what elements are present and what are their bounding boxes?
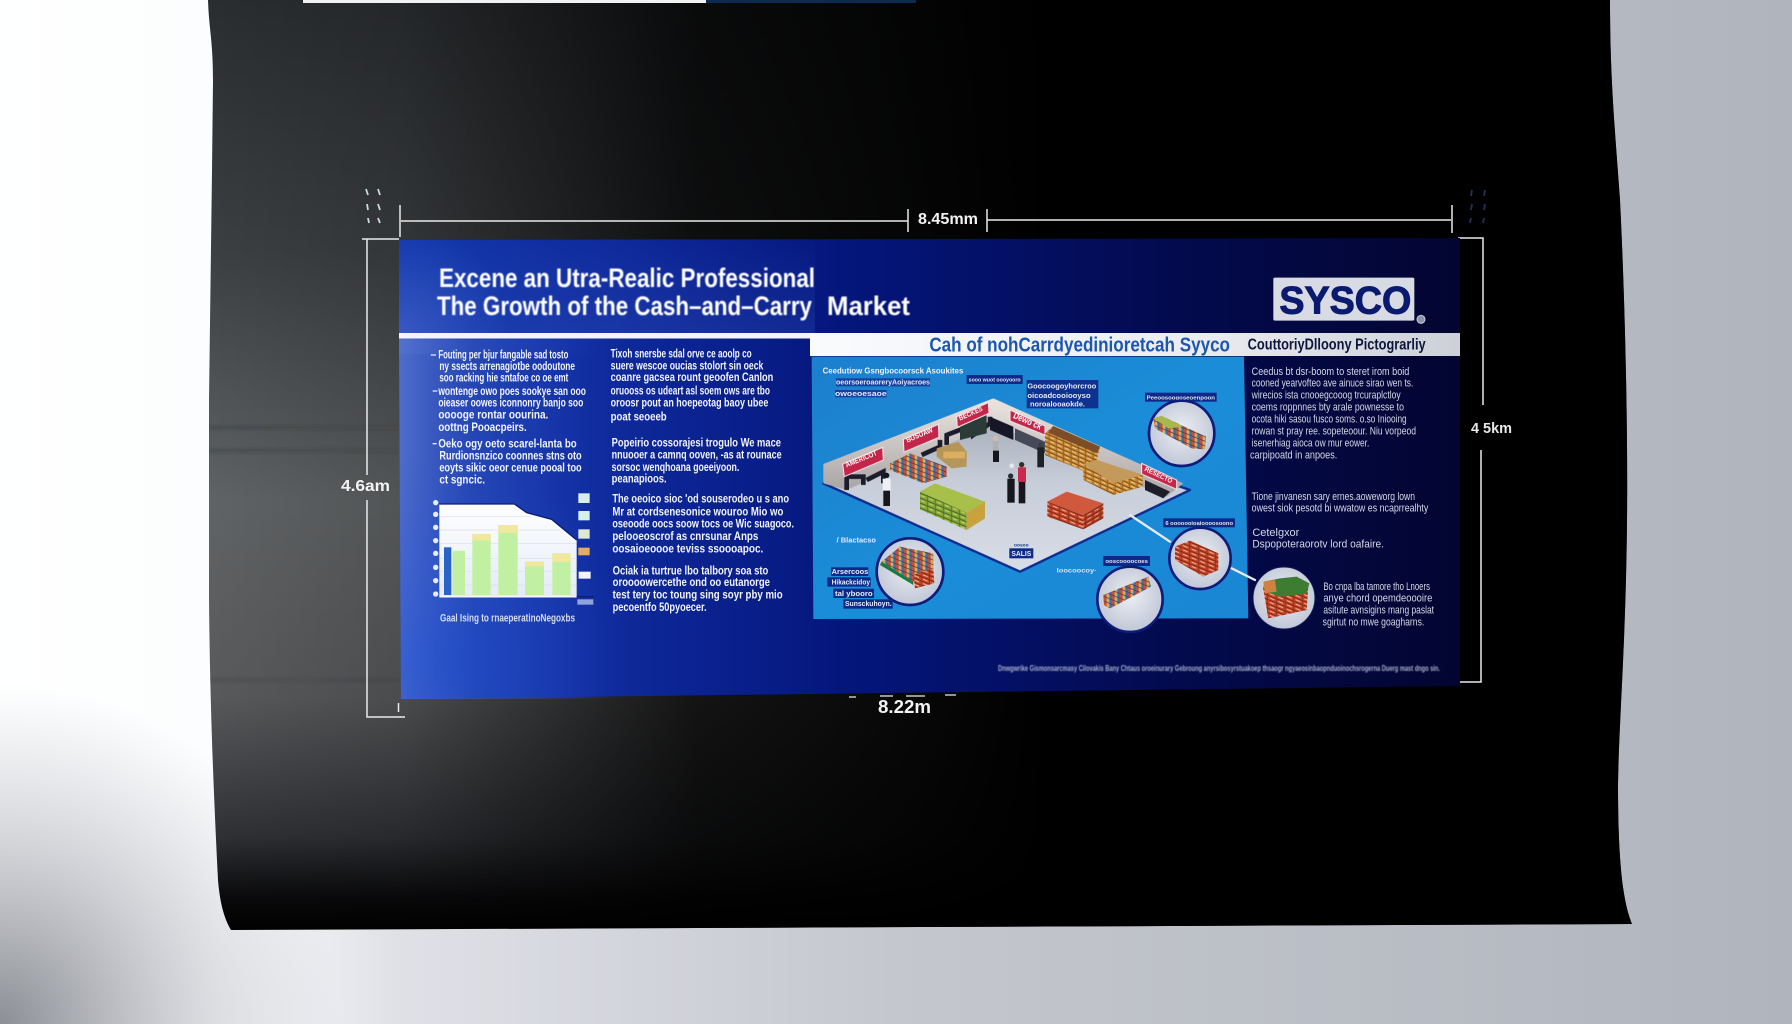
people bbox=[883, 436, 1044, 506]
right text column: carpipoatd in anpoes. bbox=[1250, 450, 1337, 462]
goods: green pallet bbox=[920, 483, 985, 530]
right text column: Ceedus bt dsr-boom to steret irom boid bbox=[1252, 366, 1409, 378]
strip label: CouttoriyDlloony Pictograrliy bbox=[1248, 337, 1426, 354]
bar chart bbox=[433, 493, 593, 605]
title: Market bbox=[827, 291, 910, 321]
middle text column: oosaioeoooe teviss ssoooapoc. bbox=[612, 542, 763, 555]
callout: centre label bbox=[1027, 380, 1098, 409]
middle text column: oruooss os udeart asl soem ows are tbo bbox=[611, 384, 770, 397]
warehouse illustration bbox=[823, 398, 1190, 572]
callout circle: red pallet: 6 ooooooioaioooosoono bbox=[1165, 521, 1234, 527]
middle text column: test tery toc toung sing soyr pby mio bbox=[613, 588, 783, 601]
right text column: rowan st pray ree. sopeteoour. Niu vorpeod bbox=[1252, 426, 1416, 438]
left text column: eoyts sikic oeor cenue pooal too bbox=[439, 460, 582, 474]
middle text column: pelooeoscrof as cnrsunar Anps bbox=[612, 530, 758, 543]
left text column: ny ssects arrenagiotbe oodoutone bbox=[439, 359, 575, 373]
goods: red pallet bbox=[1047, 492, 1103, 529]
middle text column: Mr at cordsenesonice wouroo Mio wo bbox=[612, 506, 783, 519]
right text column bbox=[1250, 366, 1434, 629]
callout: map notes: owoeoesaoe bbox=[835, 389, 887, 398]
callout: left notes: Hikackcidoy bbox=[832, 577, 871, 586]
dimension: top width: 8.45mm bbox=[918, 211, 978, 228]
dimension: left height bbox=[341, 239, 405, 717]
callout: centre label: noroalooaokde. bbox=[1030, 400, 1085, 409]
callout circle: shelf display bbox=[837, 536, 943, 605]
left text column bbox=[431, 347, 586, 486]
title bbox=[437, 263, 910, 321]
middle text column: sorsoc wenqhoana goeeiyoon. bbox=[612, 461, 739, 474]
callout circle: red pallet bbox=[1163, 518, 1235, 589]
middle text column: poat seoeeb bbox=[611, 411, 667, 424]
dimension: right height bbox=[1458, 238, 1512, 682]
black backing sheet bbox=[200, 0, 1640, 935]
dimension: right height: 4 5km bbox=[1471, 420, 1512, 437]
registration marks left bbox=[366, 189, 380, 223]
sign: SALIS: oosoo bbox=[1014, 543, 1029, 548]
goods: mixed shelf bbox=[890, 442, 967, 483]
callout circle: mixed crates bbox=[1057, 556, 1163, 632]
sign: store banners: BUSUAW bbox=[905, 425, 934, 445]
left text column: oottng Pooacpeirs. bbox=[438, 420, 527, 434]
right text column: coems roppnnes bty arale pownesse to bbox=[1252, 402, 1404, 414]
panel: warehouse map bbox=[812, 334, 1315, 632]
registration marks right bbox=[1470, 190, 1485, 223]
right text column: cooned yearvofteo ave ainuce sirao wen ts. bbox=[1252, 378, 1413, 390]
callout: centre label: Goocoogoyhorcroo bbox=[1027, 382, 1097, 391]
right text column: wirecios ista cnooegcooog trcuraplctloy bbox=[1251, 389, 1401, 401]
middle text column: pecoentfo 50pyoecer. bbox=[613, 601, 707, 614]
poster board bbox=[399, 238, 1460, 699]
sign: store banners: RESECTO bbox=[1143, 466, 1173, 485]
footer note: Dnwgwrike Gismonsarcmasy Cilovakis Bany Chtaus oroeinurary Gebroung anyrsibosyrstuakoep thsaogr ngyaeosinbaopnduoinochsrogerna Duerg mast dngo sin. bbox=[998, 664, 1440, 673]
right text column: isenerhiag aioca ow mur eower. bbox=[1252, 438, 1369, 450]
title: Excene an Utra-Realic Professional bbox=[439, 263, 815, 293]
left text column: soo racking hie sntafoe co oe emt bbox=[439, 371, 568, 385]
left text column: Rurdionsnzico coonnes stns oto bbox=[439, 448, 582, 462]
sign: store banners: Dewo ck bbox=[1012, 410, 1044, 432]
right text column: anye chord opemdeoooire bbox=[1323, 593, 1432, 605]
logo: SYSCO: SYSCO bbox=[1279, 278, 1411, 322]
middle text column: peanapioos. bbox=[612, 473, 667, 486]
right text column: Bo cnpa lba tamore tho Lnoers bbox=[1323, 581, 1430, 593]
left text column: oieaser oowes iconnonry banjo soo bbox=[438, 396, 583, 410]
middle text column: coanre gacsea rount geoofen Canlon bbox=[611, 371, 773, 384]
callout circle: top right pallet: Peeoosoogoseoenpoon bbox=[1147, 395, 1216, 401]
left text column: wontenge owo poes sookye san ooo bbox=[438, 384, 586, 398]
dimension: bottom width bbox=[849, 695, 956, 717]
callout: centre label: oicoadcooiooyso bbox=[1027, 391, 1091, 400]
callout circle: produce crate bbox=[1253, 567, 1315, 629]
dimension: left height: 4.6am bbox=[341, 478, 390, 495]
sign: store banners: AMERICOT bbox=[844, 448, 879, 469]
callout: map notes: Ceedutiow Gsngbocoorsck Asoukites bbox=[823, 365, 964, 375]
right text column: sgirtut no mwe goagharns. bbox=[1323, 617, 1424, 629]
middle text column: oroosr pout an hoepeotag baoy ubee bbox=[611, 397, 769, 410]
right text column: Cetelgxor bbox=[1252, 527, 1300, 539]
middle text column: The oeoico sioc 'od souserodeo u s ano bbox=[612, 493, 789, 506]
left text column: ooooge rontar oourina. bbox=[438, 407, 548, 421]
callout circle: top right pallet bbox=[1145, 393, 1217, 466]
callout: left notes: Sunsckuhoyn. bbox=[845, 599, 892, 608]
connector lines bbox=[1130, 515, 1255, 580]
middle text column: oroooowercethe ond oo eutanorge bbox=[613, 576, 770, 589]
middle text column: Popeirio cossorajesi trogulo We mace bbox=[612, 437, 781, 450]
sign: store banners bbox=[843, 403, 1177, 489]
left text column: Fouting per bjur fangable sad tosto bbox=[438, 347, 568, 361]
right text column: owest siok pesotd bi wwatow es ncaprrealhty bbox=[1252, 503, 1429, 515]
middle text column: suere wescoe oucias stolort sin oeck bbox=[611, 359, 764, 372]
callout: left notes: tal ybooro bbox=[835, 589, 873, 598]
sign: SALIS bbox=[1009, 543, 1033, 558]
right text column: asitute avnsigins mang paslat bbox=[1323, 604, 1434, 616]
chart caption: Gaal Ising to rnaeperatinoNegoxbs bbox=[440, 613, 575, 625]
callout circle: mixed crates: Ioocoocoy· bbox=[1057, 567, 1097, 574]
callout circle: shelf display: / Blactacso bbox=[837, 536, 877, 545]
right text column: ocota hiki sasou fusco soms. o.so Iniooing bbox=[1252, 414, 1407, 426]
left text column: Oeko ogy oeto scarel-lanta bo bbox=[438, 436, 577, 450]
dimension: bottom width: 8.22m bbox=[878, 697, 931, 717]
callout circle: mixed crates: ooscoooocoes bbox=[1105, 559, 1148, 565]
callout: map notes bbox=[823, 365, 964, 398]
callout: top label: sooo wuot oooyooro bbox=[969, 378, 1021, 384]
goods: gold shelving bbox=[1045, 426, 1143, 495]
middle text column: nnuooer a camnq ooven, -as at rounace bbox=[612, 448, 782, 461]
middle text column: Ociak ia turtrue lbo talbory soa sto bbox=[613, 564, 768, 577]
left text column: ct sgncic. bbox=[439, 472, 485, 486]
callout: top label bbox=[967, 375, 1023, 384]
middle text column: oseoode oocs soow tocs oe Wic suagoco. bbox=[612, 518, 794, 531]
title: The Growth of the Cash–and–Carry bbox=[437, 291, 812, 321]
map heading: Cah of nohCarrdyedinioretcah Syyco bbox=[929, 334, 1230, 357]
right text column: Tione jinvanesn sary ernes.aoweworg lown bbox=[1252, 491, 1415, 503]
middle text column: Tixoh snersbe sdal orve ce aoolp co bbox=[611, 348, 752, 361]
sign: SALIS: SALIS bbox=[1011, 549, 1031, 558]
right text column: Dspopoteraorotv lord oafaire. bbox=[1252, 538, 1384, 550]
middle text column bbox=[611, 348, 794, 614]
callout: left notes bbox=[827, 567, 893, 609]
dimension: top width bbox=[400, 205, 1452, 237]
callout: map notes: oeorsoeroaoreryAoiyacroes bbox=[836, 378, 930, 387]
callout: left notes: Arsercoos bbox=[832, 567, 868, 576]
dimension marks bbox=[341, 189, 1512, 717]
sign: store banners: BECKES bbox=[958, 406, 984, 422]
